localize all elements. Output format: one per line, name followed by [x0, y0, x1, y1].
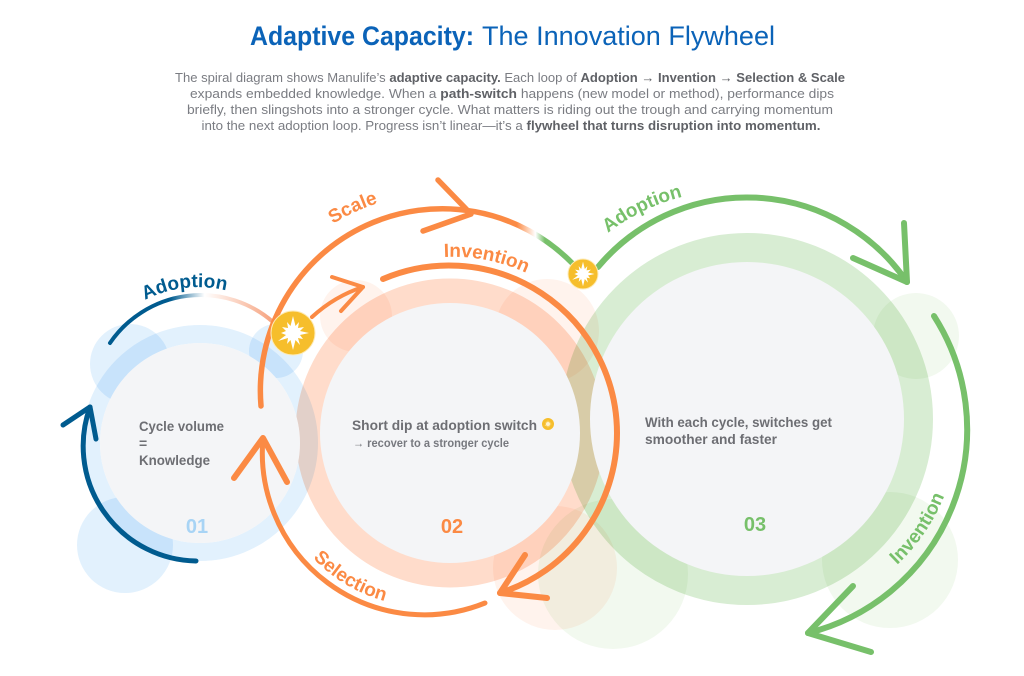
intro text block: briefly, then slingshots into a stronger cycle. What matters is riding out the trough and carrying momentum	[187, 102, 833, 117]
label: selection: Selection	[315, 550, 386, 601]
icon: large burst	[271, 311, 315, 355]
title	[250, 21, 775, 51]
cycle 01 number: 01	[186, 516, 208, 538]
cycle 01 text: Cycle volume	[139, 418, 224, 434]
arc: green invention	[805, 313, 970, 655]
cycle 01 text	[139, 418, 224, 468]
label: invention 02: Invention	[444, 244, 528, 272]
cycle 02 text: → recover to a stronger cycle	[353, 436, 509, 450]
intro text block: expands embedded knowledge. When a path-switch happens (new model or method), performance dips	[190, 86, 835, 101]
panel: cycle 01	[100, 343, 300, 543]
arrow: slingshot from burst	[312, 277, 363, 317]
panel: cycle 02	[320, 303, 580, 563]
icon: inline burst	[542, 418, 554, 430]
cycle 01 text: =	[139, 435, 147, 451]
arrow: blue lower arc	[63, 407, 196, 561]
cycle 01 text: Knowledge	[139, 452, 210, 468]
intro text block	[175, 70, 845, 133]
cycle 02 number: 02	[441, 516, 463, 538]
intro text block: The spiral diagram shows Manulife’s adaptive capacity. Each loop of Adoption → Invention → Selection & Scale	[175, 70, 845, 85]
cycle 03 text: smoother and faster	[645, 431, 778, 447]
title: The Innovation Flywheel	[482, 21, 775, 51]
title: Adaptive Capacity:	[250, 21, 474, 51]
arc: blue adoption	[108, 273, 272, 346]
label: invention 03: Invention	[888, 494, 944, 564]
label: adoption 01: Adoption	[144, 273, 226, 300]
cycle 03 text	[645, 414, 832, 447]
arc: green adoption	[596, 188, 910, 285]
background rings and blobs	[77, 248, 959, 649]
label: scale: Scale	[328, 194, 376, 222]
arc: orange invention	[380, 244, 620, 601]
arc: orange scale	[258, 177, 574, 409]
cycle 03 number: 03	[744, 514, 766, 536]
panel: cycle 03	[590, 262, 904, 576]
label: adoption 03: Adoption	[604, 188, 682, 233]
cycle 02 text: Short dip at adoption switch	[352, 417, 537, 433]
icon: small burst	[568, 259, 598, 289]
intro text block: into the next adoption loop. Progress isn’t linear—it’s a flywheel that turns disruption into momentum.	[202, 118, 821, 133]
cycle 02 text	[352, 417, 537, 450]
arc: orange selection	[231, 435, 488, 618]
cycle 03 text: With each cycle, switches get	[645, 414, 832, 430]
